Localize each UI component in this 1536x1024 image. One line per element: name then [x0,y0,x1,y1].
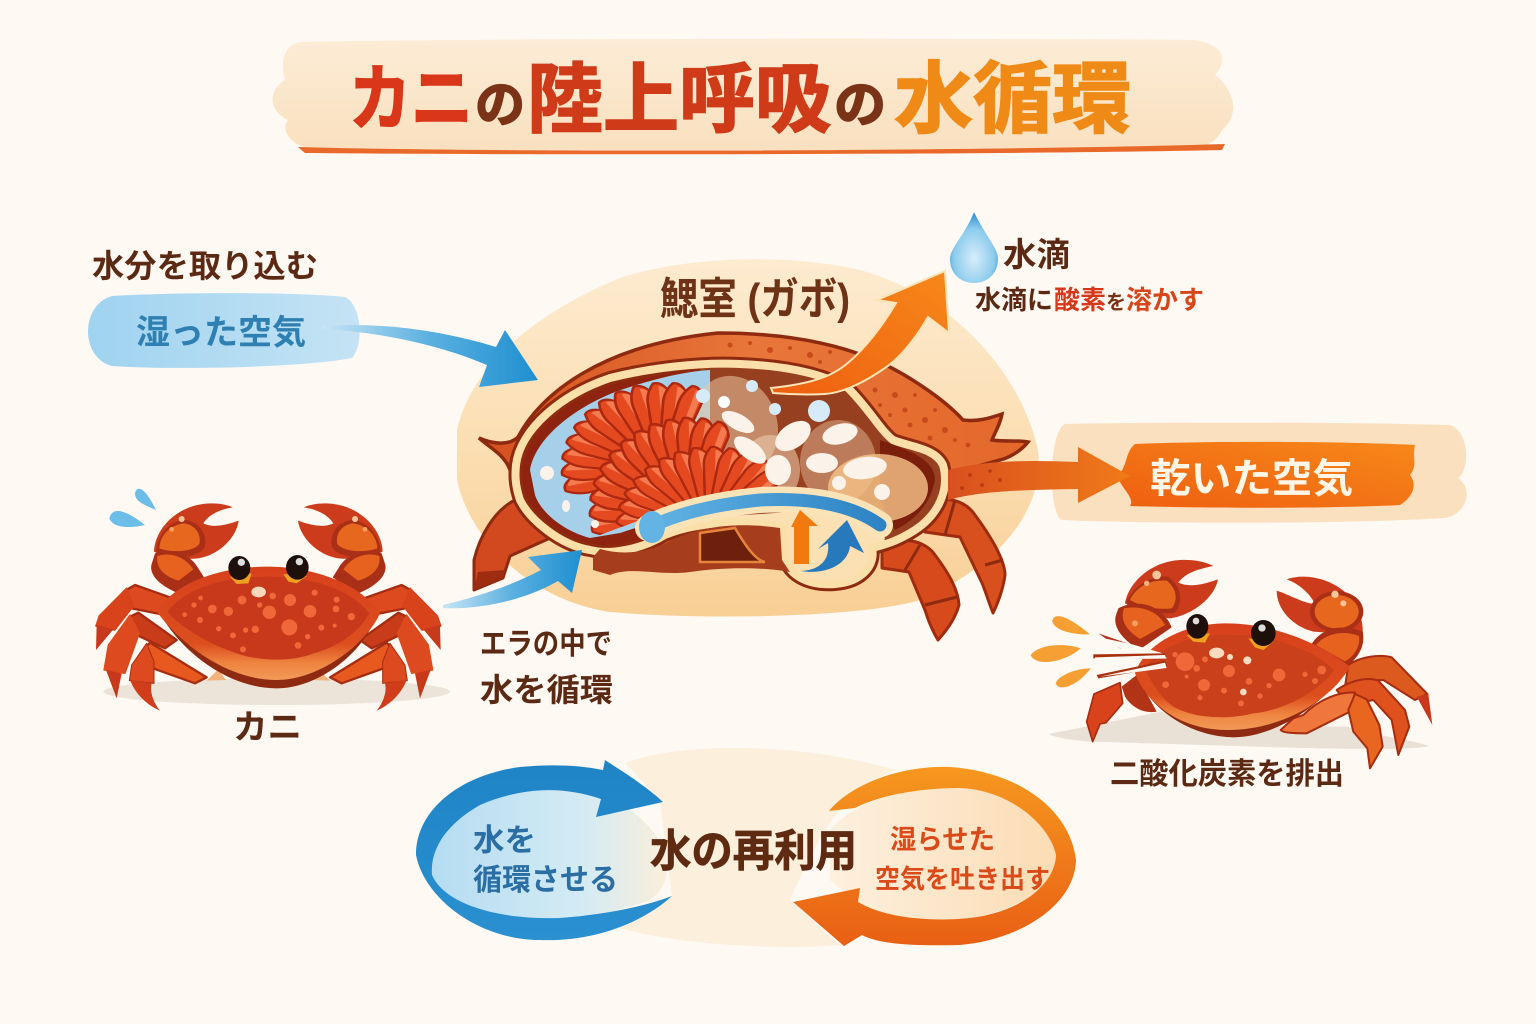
label: water droplet: 水滴 [1003,236,1070,273]
title text: の [475,77,525,133]
crab: front view [96,489,450,711]
right legs [1281,656,1432,768]
eye: right [1248,620,1276,650]
label line 2: 水を循環 [480,672,613,708]
water drop icon [950,212,998,283]
underside tissue [614,512,885,580]
blue ring arrow [416,760,672,940]
caption: dissolving oxygen: を [1106,291,1126,314]
left leg [474,500,557,590]
title text: カニ [349,60,473,140]
inner water area [431,785,667,920]
carapace [157,567,380,680]
underside [1137,668,1348,737]
caption: dissolving oxygen: 溶かす [1126,285,1204,315]
chamber label: 鰓室 (ガボ) [660,275,850,324]
left legs [1087,675,1157,742]
label: circulate in gills: エラの中で [480,628,612,661]
label: crab: カニ [233,709,302,747]
shadow [103,678,450,705]
title text [349,55,1131,143]
carapace spots [1162,652,1326,706]
underside [160,613,377,688]
arrow speckles [960,469,1002,490]
text: exhale moist air: 湿らせた [890,825,995,855]
eye: left [228,556,252,584]
title banner [273,39,1233,154]
orange breath drops [1031,616,1091,687]
orange ring arrow [793,767,1076,946]
shadow [1048,712,1429,749]
air sacs [695,376,928,520]
body cross-section [515,360,950,590]
water tube [648,500,880,528]
left claw [1115,560,1218,649]
caption: dissolving oxygen: 水滴に [975,285,1053,315]
center label: 水の再利用 [650,827,857,876]
arrow: air into gills [443,550,582,608]
center blob [620,748,895,947]
crab: exhaling [1031,560,1432,768]
arrow: orange up to water drop [771,271,949,394]
blue tube [648,500,880,528]
carapace highlights [1209,648,1251,695]
panel: dry air [1052,423,1467,523]
right limbs [298,503,441,711]
caption: dissolving oxygen [975,285,1204,315]
text: exhale moist air: 空気を吐き出す [875,864,1050,894]
white droplets [540,406,890,528]
label: circulate in gills [480,628,613,708]
left limbs [96,503,239,711]
dry air text: 乾いた空気 [1150,457,1353,501]
humid air text: 湿った空気 [136,314,306,352]
title text: 水循環 [894,55,1131,143]
inner air area [830,787,1056,922]
arrow: small blue curved [801,520,864,572]
label: exhale CO2: 二酸化炭素を排出 [1110,758,1344,791]
arrow: humid air into gill chamber [322,325,538,387]
gill lamellae [560,382,778,535]
right claw [1277,577,1363,667]
crab underside [593,525,790,575]
banner background [273,39,1233,150]
arrow: small orange up [791,510,818,564]
breath puff lines [1093,633,1167,678]
carapace [1135,623,1350,730]
carapace texture [167,577,369,660]
caption: dissolving oxygen: 酸素 [1054,285,1106,315]
text: circulate water: 水を [473,823,536,858]
water reuse cycle [416,748,1076,947]
rounded tube end [639,511,665,543]
text: circulate water [473,823,618,897]
eye: left [1186,614,1210,643]
title text: の [834,77,886,133]
carapace spots [182,590,355,652]
shell [479,333,1028,560]
water droplets [696,380,830,422]
chamber interior brown [700,368,941,540]
eye: right [283,555,309,583]
chamber interior blue [530,370,710,538]
right rear leg [925,499,1005,613]
carapace highlight [251,587,266,597]
right front leg [882,541,959,640]
background blob [457,259,1039,616]
text: circulate water: 循環させる [473,864,618,897]
label: take in moisture: 水分を取り込む [92,248,318,284]
water splash drops [109,489,156,527]
pill: humid air [88,293,360,368]
title text: 陸上呼吸 [527,58,831,143]
central crab diagram [457,259,1039,640]
arrow: dry air out [948,447,1130,503]
dry air brush [1118,442,1415,508]
shell speckles [728,341,970,448]
text: exhale moist air [875,825,1050,894]
banner underline [298,144,1225,154]
carapace texture [1145,635,1334,717]
